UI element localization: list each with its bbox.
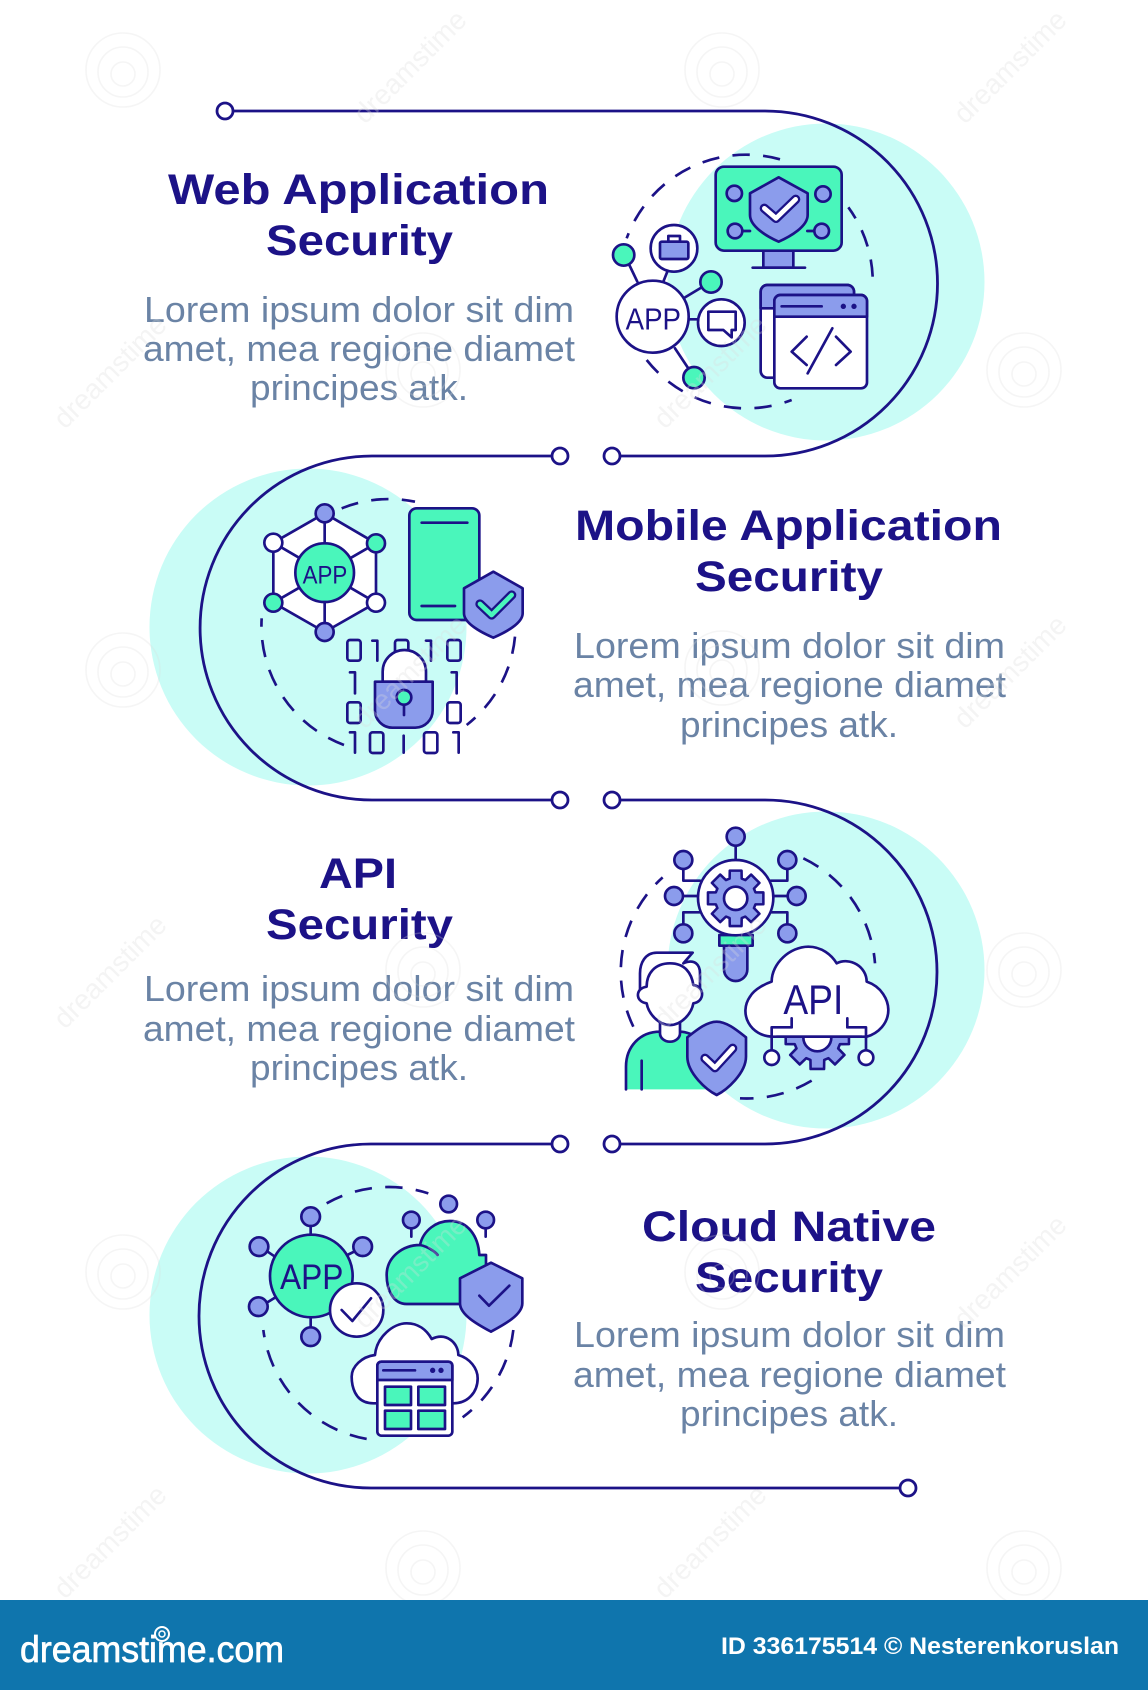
text block 2: amet, mea regione diamet bbox=[573, 664, 1006, 705]
text: dreamstime bbox=[947, 4, 1073, 129]
heading: api security: API bbox=[319, 850, 397, 898]
text block 1: Lorem ipsum dolor sit dim bbox=[144, 289, 574, 330]
text block 2 bbox=[573, 625, 1006, 745]
logo: dreamstime.com: dreamstime.com bbox=[20, 1629, 284, 1670]
person with shield bbox=[626, 953, 746, 1095]
mint circle 1 bbox=[668, 124, 984, 440]
heading: web application security: Security bbox=[266, 217, 453, 265]
binary digits with lock bbox=[347, 640, 461, 753]
heading: mobile application security: Security bbox=[695, 553, 883, 601]
app circle with check bbox=[249, 1207, 383, 1346]
icon: web app security bbox=[613, 155, 873, 408]
heading: mobile application security bbox=[575, 502, 1002, 601]
connector curve 1 bbox=[217, 103, 938, 464]
heading: cloud native security bbox=[642, 1203, 936, 1302]
text: dreamstime bbox=[647, 309, 773, 434]
heading: web application security: Web Application bbox=[168, 166, 549, 214]
text block 2: principes atk. bbox=[680, 704, 898, 745]
connector curve 2 bbox=[200, 448, 568, 808]
heading: cloud native security: Security bbox=[695, 1254, 883, 1302]
text block 4: Lorem ipsum dolor sit dim bbox=[574, 1314, 1005, 1355]
app node network bbox=[613, 225, 745, 388]
text: dreamstime bbox=[47, 309, 173, 434]
connector curve 4 bbox=[199, 1136, 916, 1496]
text block 4 bbox=[573, 1314, 1006, 1434]
text block 4: principes atk. bbox=[680, 1393, 898, 1434]
app node network: APP bbox=[626, 302, 681, 336]
app hexagon network bbox=[264, 504, 385, 641]
text block 1 bbox=[143, 289, 575, 408]
credit: image id and author: ID 336175514 © Nesterenkoruslan bbox=[721, 1633, 1119, 1660]
monitor with shield bbox=[716, 167, 842, 268]
mint circle 4 bbox=[150, 1156, 466, 1474]
heading: cloud native security: Cloud Native bbox=[642, 1203, 936, 1251]
heading: mobile application security: Mobile Application bbox=[575, 502, 1002, 550]
heading: web application security bbox=[168, 166, 549, 265]
text block 4: amet, mea regione diamet bbox=[573, 1354, 1006, 1395]
panel: mobile application security bbox=[150, 448, 1006, 808]
panel: cloud native security bbox=[150, 1136, 1006, 1496]
phone with shield bbox=[409, 508, 523, 638]
icon: mobile app security bbox=[261, 499, 523, 753]
white cloud with window bbox=[352, 1323, 478, 1436]
text: dreamstime bbox=[347, 4, 473, 129]
text block 3: principes atk. bbox=[250, 1047, 468, 1088]
text block 3: Lorem ipsum dolor sit dim bbox=[144, 968, 574, 1009]
heading: api security bbox=[266, 850, 453, 949]
text block 1: amet, mea regione diamet bbox=[143, 328, 575, 369]
heading: api security: Security bbox=[266, 901, 453, 949]
text: dreamstime bbox=[947, 1209, 1073, 1334]
text: dreamstime bbox=[347, 609, 473, 734]
api cloud with gear bbox=[745, 947, 888, 1069]
mint circle 3 bbox=[668, 812, 984, 1128]
footer banner bbox=[0, 1600, 1148, 1690]
icon: cloud native security bbox=[249, 1187, 522, 1439]
api cloud with gear: API bbox=[783, 976, 843, 1023]
gear magnifier with circuit bbox=[665, 828, 806, 981]
green cloud with shield bbox=[387, 1196, 522, 1332]
code windows bbox=[761, 285, 867, 388]
text block 3: amet, mea regione diamet bbox=[143, 1008, 575, 1049]
connector curve 3 bbox=[604, 792, 937, 1152]
text: dreamstime bbox=[47, 1479, 173, 1604]
text: dreamstime bbox=[347, 1209, 473, 1334]
text: dreamstime bbox=[47, 909, 173, 1034]
panel: api security bbox=[143, 792, 984, 1152]
icon: api security bbox=[621, 828, 888, 1099]
app circle with check: APP bbox=[280, 1258, 343, 1297]
mint circle 2 bbox=[150, 468, 466, 786]
text block 2: Lorem ipsum dolor sit dim bbox=[574, 625, 1005, 666]
app hexagon network: APP bbox=[303, 561, 347, 589]
panel: web application security bbox=[143, 103, 984, 464]
text block 1: principes atk. bbox=[250, 367, 468, 408]
text: dreamstime bbox=[947, 609, 1073, 734]
text: dreamstime bbox=[647, 1479, 773, 1604]
text: dreamstime bbox=[647, 909, 773, 1034]
text block 3 bbox=[143, 968, 575, 1088]
